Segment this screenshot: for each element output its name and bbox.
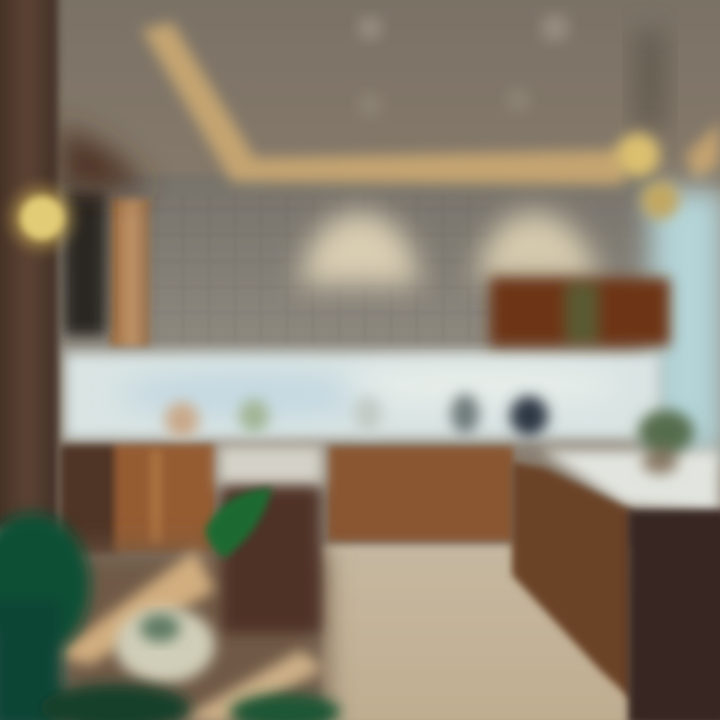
pendant light left [10, 186, 74, 250]
wall light glow left [300, 212, 420, 285]
dark hanging panel [64, 190, 106, 335]
tiled wall [60, 175, 660, 355]
ceiling beam [142, 22, 720, 185]
base cabinet centre [328, 447, 513, 541]
backsplash [64, 352, 660, 440]
island base [222, 487, 320, 633]
window [650, 190, 720, 455]
right counter top [540, 450, 720, 512]
right dark cabinet [628, 510, 720, 720]
left wooden post [110, 198, 150, 346]
green leaf centre [205, 488, 272, 558]
wall light glow right [475, 212, 600, 280]
foreground plant [0, 513, 340, 720]
counter items [165, 394, 548, 438]
potted plant on counter [638, 410, 694, 474]
right base cabinet [512, 462, 632, 700]
base cabinet left [60, 445, 215, 555]
floor [320, 545, 640, 720]
dark left bracket [60, 125, 150, 190]
pendant lights right [616, 30, 679, 219]
lower wooden plank [180, 650, 325, 720]
lower left floor strip [60, 550, 325, 720]
island counter top [218, 445, 323, 487]
white bowl lower left [115, 607, 215, 683]
upper wood cabinet [490, 278, 670, 346]
ceiling [0, 0, 720, 190]
wooden plank lower left [55, 550, 215, 665]
leaf accent in bowl [140, 614, 180, 642]
left column [0, 0, 58, 530]
